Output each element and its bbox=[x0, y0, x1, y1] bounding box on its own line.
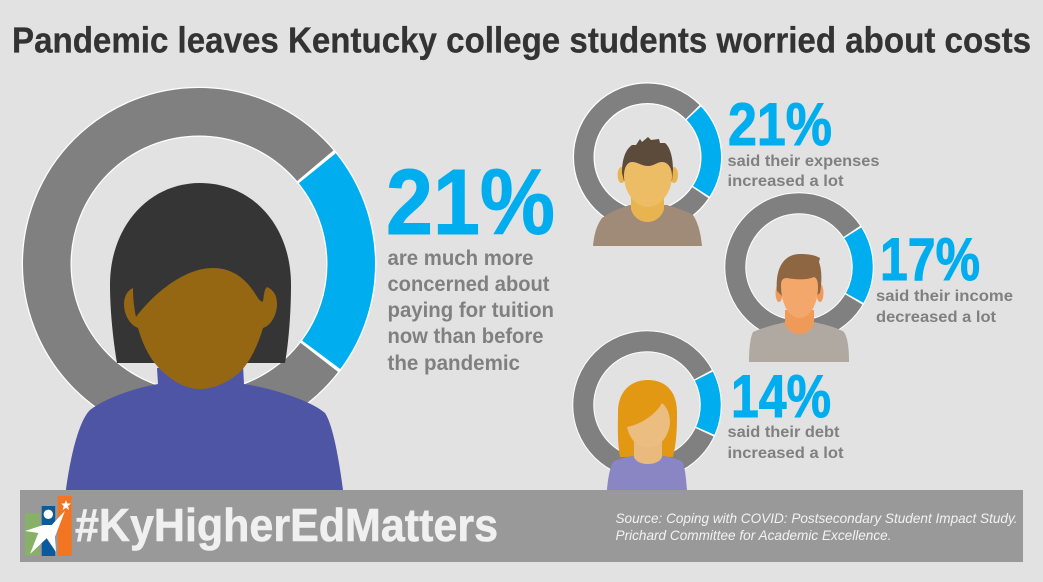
icon: Prichard Committee logo bbox=[25, 496, 72, 556]
panel: expenses bbox=[557, 67, 880, 247]
stat: 21%: 21% bbox=[386, 150, 555, 254]
source note: Prichard Committee for Academic Excellence. bbox=[616, 527, 892, 543]
person: woman with dark hair bbox=[66, 183, 343, 490]
donut chart: 21% tuition bbox=[0, 49, 414, 479]
stat: 14%: 14% bbox=[731, 363, 831, 430]
text block: debt description bbox=[728, 424, 844, 462]
person: woman with orange hair bbox=[607, 380, 687, 490]
text block: tuition description: are much more bbox=[388, 246, 534, 270]
text block: income description: said their income bbox=[876, 288, 1013, 305]
panel: income bbox=[711, 179, 1013, 362]
text block: income description: decreased a lot bbox=[876, 309, 997, 326]
person: man with brown hair bbox=[749, 254, 849, 362]
donut chart: 17% income bbox=[711, 179, 887, 355]
text block: debt description: increased a lot bbox=[728, 445, 844, 462]
panel: debt bbox=[561, 319, 844, 491]
text block: tuition description: now than before bbox=[388, 324, 544, 348]
text block: tuition description: paying for tuition bbox=[388, 298, 554, 322]
text block: debt description: said their debt bbox=[728, 424, 840, 441]
stat: 17%: 17% bbox=[880, 226, 980, 293]
text block: tuition description: concerned about bbox=[388, 272, 550, 296]
donut chart: 14% debt bbox=[561, 319, 733, 491]
text block: tuition description bbox=[388, 246, 554, 375]
text block: expenses description: increased a lot bbox=[728, 173, 844, 190]
person: man with spiky brown hair bbox=[593, 137, 702, 246]
source note bbox=[616, 510, 1018, 543]
donut chart: 21% expenses bbox=[557, 67, 738, 247]
text block: tuition description: the pandemic bbox=[388, 351, 520, 375]
panel: tuition concern bbox=[0, 49, 555, 490]
source note: Source: Coping with COVID: Postsecondary Student Impact Study. bbox=[616, 510, 1018, 526]
hashtag: #KyHigherEdMatters bbox=[75, 499, 498, 551]
text block: expenses description: said their expenses bbox=[728, 153, 880, 170]
text block: expenses description bbox=[728, 153, 880, 190]
footer banner bbox=[20, 490, 1023, 562]
text block: income description bbox=[876, 288, 1013, 326]
stat: 21%: 21% bbox=[728, 91, 832, 158]
